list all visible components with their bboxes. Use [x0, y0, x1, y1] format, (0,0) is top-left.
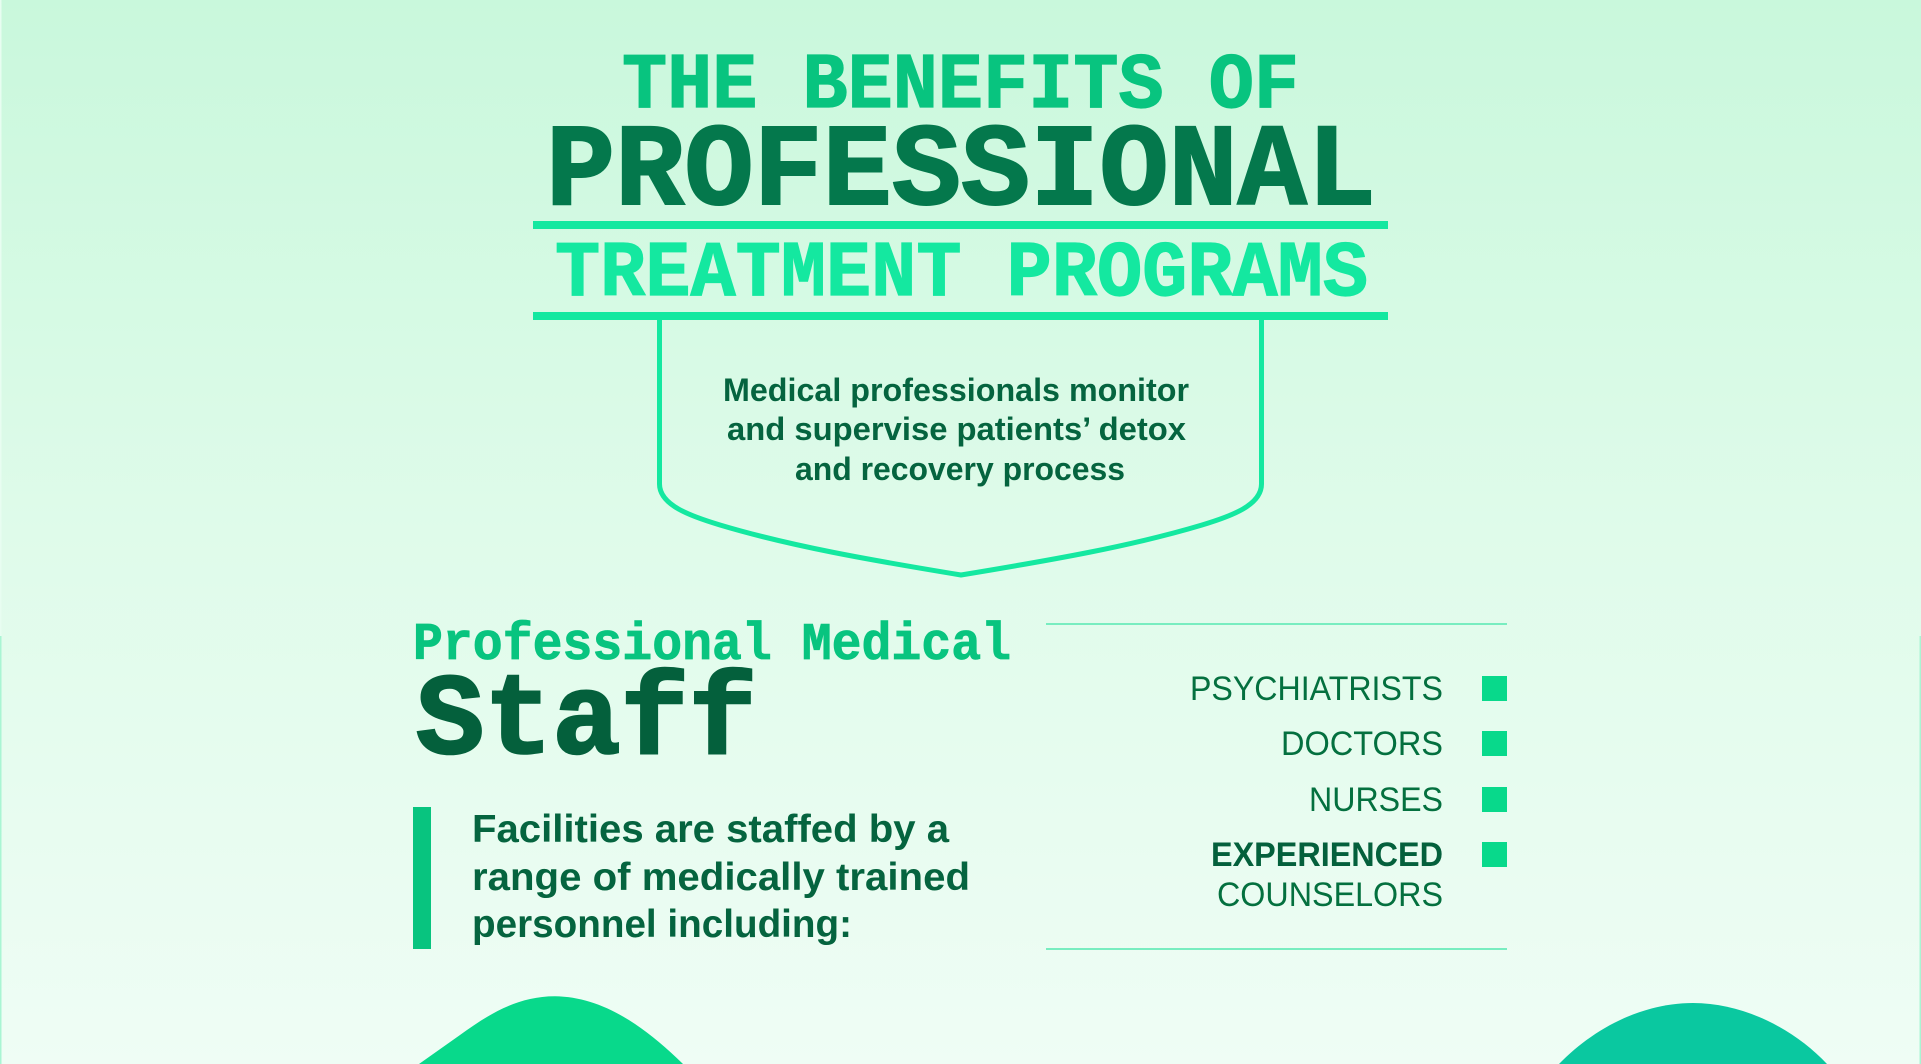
- description text: personnel including:: [472, 903, 852, 946]
- intro text: [723, 372, 1189, 487]
- title line 2: PROFESSIONAL: [546, 108, 1376, 240]
- list item: experienced counselors: COUNSELORS: [1217, 876, 1443, 914]
- list item: doctors: DOCTORS: [1281, 725, 1443, 763]
- description text: range of medically trained: [472, 856, 970, 899]
- description text: Facilities are staffed by a: [472, 808, 949, 851]
- title line 3: TREATMENT PROGRAMS: [555, 229, 1368, 319]
- heading small line: Professional Medical: [413, 615, 1011, 675]
- callout: shield outline with intro text: [660, 320, 1262, 575]
- intro text: and supervise patients’ detox: [727, 411, 1186, 447]
- heading large word: Staff: [416, 657, 757, 788]
- section heading: [413, 615, 1011, 788]
- title line 1: THE BENEFITS OF: [622, 41, 1299, 131]
- description text: [472, 808, 970, 946]
- shield outline: [660, 320, 1262, 575]
- title rule bottom: [533, 312, 1388, 320]
- title: [533, 41, 1388, 320]
- decorative hill left: [419, 996, 683, 1064]
- decorative hill right: [1559, 1003, 1827, 1064]
- list item: experienced counselors: EXPERIENCED: [1211, 836, 1443, 874]
- title rule top: [533, 221, 1388, 229]
- intro text: Medical professionals monitor: [723, 372, 1189, 408]
- list item: psychiatrists: PSYCHIATRISTS: [1190, 670, 1443, 708]
- list item: nurses: NURSES: [1309, 781, 1443, 819]
- accent bar: [413, 807, 431, 949]
- list item: experienced counselors: [1211, 836, 1507, 914]
- staff description with accent bar: [413, 807, 970, 949]
- intro text: and recovery process: [795, 451, 1125, 487]
- staff list: [1046, 623, 1507, 950]
